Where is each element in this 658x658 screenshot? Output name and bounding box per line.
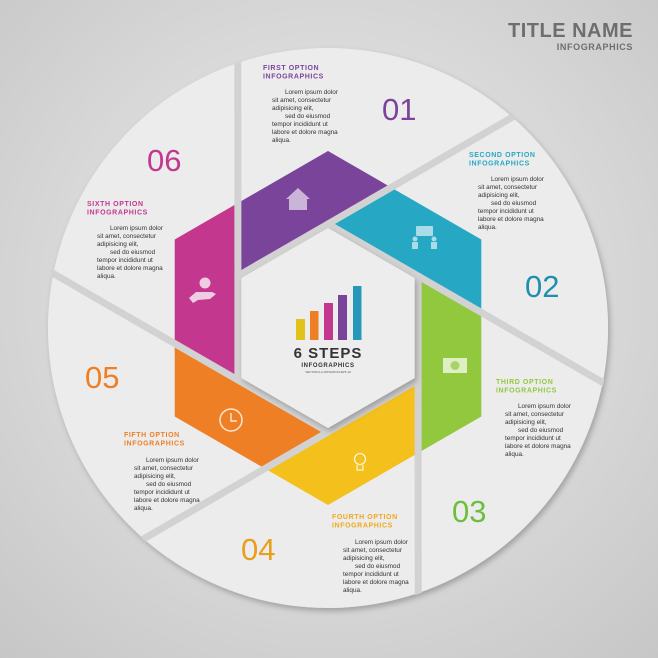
option 5 text: 05 — [85, 360, 119, 395]
option 2 text: INFOGRAPHICS — [469, 160, 530, 168]
option 3 text: adipisicing elit, — [505, 419, 547, 426]
option 4 text: sed do eiusmod — [355, 563, 401, 570]
option 5 text: adipisicing elit, — [134, 473, 176, 480]
option 1 text: tempor incididunt ut — [272, 121, 328, 128]
option 6 text: sit amet, consectetur — [97, 233, 157, 240]
option 1 text: 01 — [382, 92, 416, 127]
option 4 text — [241, 514, 409, 594]
icon: house — [286, 188, 310, 210]
option 6 text: INFOGRAPHICS — [87, 210, 148, 216]
title — [508, 20, 633, 52]
option 3 text: 03 — [452, 494, 486, 529]
option 3 text: sit amet, consectetur — [505, 411, 565, 418]
icon: money — [443, 358, 467, 373]
title: TITLE NAME — [508, 20, 633, 42]
option 2 text — [469, 152, 559, 304]
colored hexagon ring — [174, 151, 482, 505]
center label — [294, 345, 362, 374]
option 1 text: FIRST OPTION — [263, 65, 319, 72]
center label: VECTOR ILLUSTRATION EPS 10 — [305, 370, 351, 374]
panel: segment pieces — [48, 48, 608, 608]
option 5 text: sit amet, consectetur — [134, 465, 194, 472]
option 4 text: labore et dolore magna — [343, 579, 409, 586]
icon: bulb — [354, 454, 366, 470]
option 5 text: INFOGRAPHICS — [124, 440, 185, 448]
option 1 text — [263, 65, 416, 144]
option 4 text: INFOGRAPHICS — [332, 522, 393, 530]
option 5 text: tempor incididunt ut — [134, 489, 190, 496]
option 3 text: tempor incididunt ut — [505, 435, 561, 442]
option 6 text: labore et dolore magna — [97, 265, 163, 272]
option 3 text — [452, 379, 572, 529]
option 1 text: labore et dolore magna — [272, 129, 338, 136]
center label: INFOGRAPHICS — [301, 363, 355, 369]
option 5 text: Lorem ipsum dolor — [146, 457, 200, 464]
option 3 text: Lorem ipsum dolor — [518, 403, 572, 410]
option 2 text: aliqua. — [478, 224, 497, 231]
option 6 text: aliqua. — [97, 273, 116, 280]
option 2 text: sit amet, consectetur — [478, 184, 538, 191]
option 6 text: tempor incididunt ut — [97, 257, 153, 264]
option 4 text: aliqua. — [343, 587, 362, 594]
option 1 text: sed do eiusmod — [285, 113, 331, 120]
option 4 text: FOURTH OPTION — [332, 514, 398, 521]
option 3 text: INFOGRAPHICS — [496, 388, 557, 394]
option 4 text: Lorem ipsum dolor — [355, 539, 409, 546]
option 6 text: SIXTH OPTION — [87, 201, 144, 208]
option 3 text: aliqua. — [505, 451, 524, 458]
option 3 text: THIRD OPTION — [496, 379, 553, 386]
center label: 6 STEPS — [294, 345, 362, 362]
option 1 text: sit amet, consectetur — [272, 97, 332, 104]
option 6 text: sed do eiusmod — [110, 249, 156, 256]
option 4 text: tempor incididunt ut — [343, 571, 399, 578]
option 2 text: SECOND OPTION — [469, 152, 536, 159]
option 2 text: Lorem ipsum dolor — [491, 176, 545, 183]
option 6 text — [87, 143, 181, 280]
option 6 text: Lorem ipsum dolor — [110, 225, 164, 232]
bar chart — [296, 286, 362, 340]
option 2 text: sed do eiusmod — [491, 200, 537, 207]
icon: people chat — [412, 226, 437, 249]
option 4 text: sit amet, consectetur — [343, 547, 403, 554]
option 5 text: labore et dolore magna — [134, 497, 200, 504]
icon: clock — [220, 409, 242, 431]
option 5 text: sed do eiusmod — [146, 481, 192, 488]
option 2 text: labore et dolore magna — [478, 216, 544, 223]
option 1 text: INFOGRAPHICS — [263, 74, 324, 80]
option 4 text: 04 — [241, 532, 275, 567]
center hexagon — [241, 228, 415, 428]
option 2 text: adipisicing elit, — [478, 192, 520, 199]
option 4 text: adipisicing elit, — [343, 555, 385, 562]
option 1 text: aliqua. — [272, 137, 291, 144]
option 2 text: tempor incididunt ut — [478, 208, 534, 215]
option 1 text: adipisicing elit, — [272, 105, 314, 112]
title: INFOGRAPHICS — [557, 42, 633, 52]
option 5 text: aliqua. — [134, 505, 153, 512]
option 6 text: adipisicing elit, — [97, 241, 139, 248]
option 3 text: labore et dolore magna — [505, 443, 571, 450]
option 5 text — [85, 360, 200, 512]
icon: hand coin — [189, 278, 216, 303]
option 2 text: 02 — [525, 269, 559, 304]
option 1 text: Lorem ipsum dolor — [285, 89, 339, 96]
option 5 text: FIFTH OPTION — [124, 432, 180, 439]
option 3 text: sed do eiusmod — [518, 427, 564, 434]
option 6 text: 06 — [147, 143, 181, 178]
